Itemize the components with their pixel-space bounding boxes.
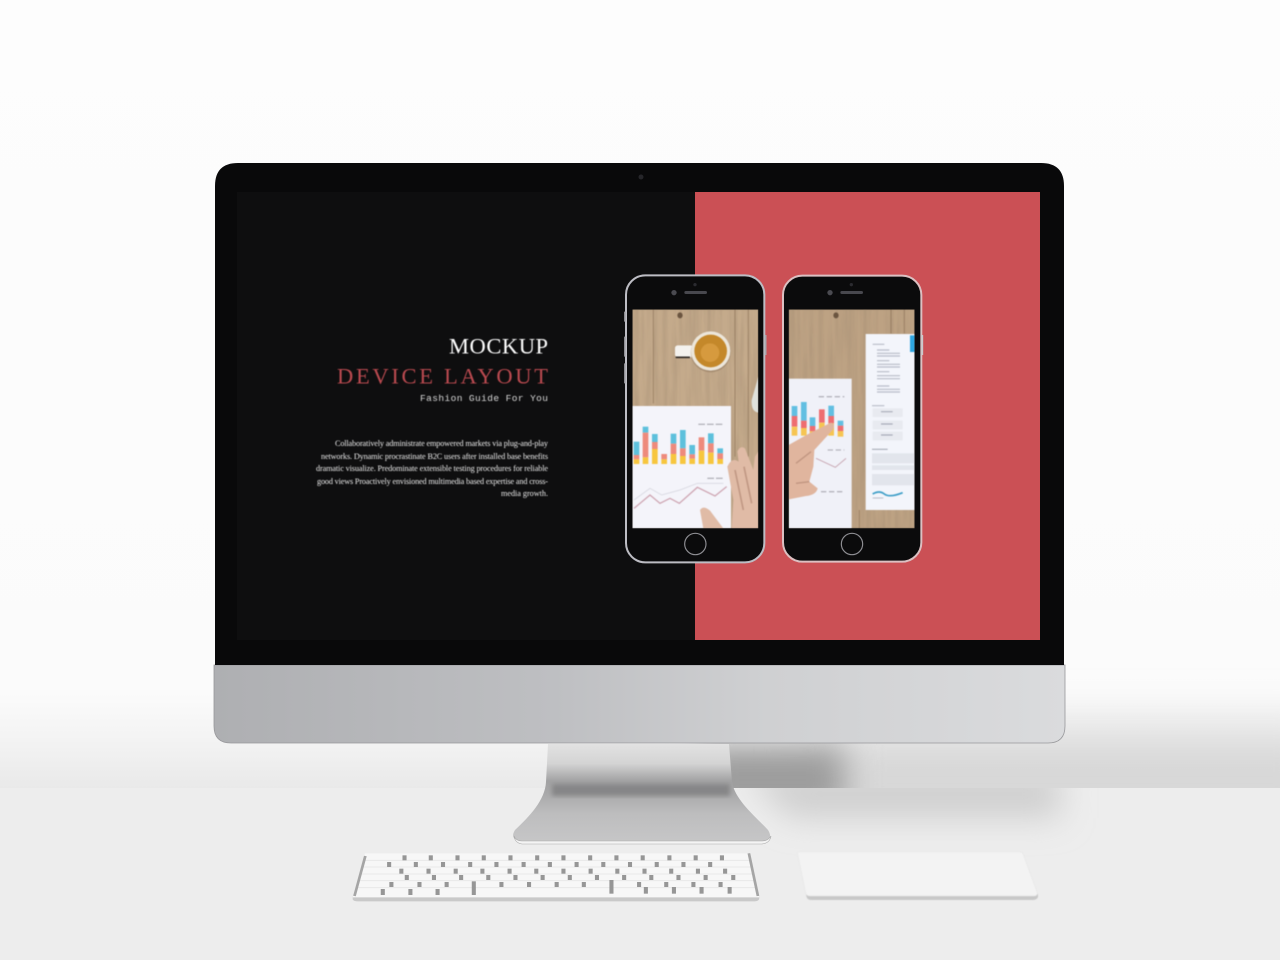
screen dark panel	[237, 192, 695, 640]
paper with charts	[632, 406, 731, 528]
body paragraph: dramatic visualize. Predominate extensible testing procedures for reliable	[316, 464, 548, 473]
shadow on desk right of stand	[756, 788, 1068, 828]
hand	[727, 447, 758, 528]
paper with bars	[789, 379, 852, 528]
monitor aluminium chin	[214, 665, 1065, 743]
monitor	[214, 163, 1065, 743]
stacked bar chart	[634, 427, 723, 464]
body paragraph: media growth.	[501, 489, 548, 498]
body paragraph	[316, 439, 549, 498]
keyboard base	[353, 897, 759, 901]
slide text block	[316, 334, 549, 498]
heading: mockup: MOCKUP	[449, 334, 548, 358]
camera	[638, 174, 644, 180]
phone body	[783, 276, 921, 562]
monitor black bezel	[215, 163, 1064, 665]
keyboard deck	[353, 853, 759, 897]
home button	[685, 533, 706, 555]
body paragraph: good views Proactively envisioned multimedia based expertise and cross-	[317, 477, 548, 486]
document sheet	[866, 334, 915, 510]
body paragraph: Collaboratively administrate empowered markets via plug-and-play	[335, 439, 549, 448]
phone body	[626, 275, 764, 562]
side buttons	[625, 312, 766, 383]
stacked bars	[792, 402, 843, 437]
heading: device layout: DEVICE LAYOUT	[337, 364, 548, 388]
earpiece and camera	[827, 283, 863, 295]
key gaps	[381, 855, 735, 895]
phone screen photo: desk with coffee and chart	[632, 309, 758, 528]
pointing hand	[789, 423, 834, 499]
side button	[920, 335, 925, 355]
phone right	[783, 276, 922, 562]
monitor stand	[513, 744, 771, 844]
coffee cup	[675, 331, 731, 372]
desk surface	[0, 788, 1280, 960]
phone screen photo: hand pointing at chart	[789, 309, 915, 528]
screen red panel	[695, 192, 1040, 640]
keyboard side edges	[354, 853, 758, 896]
subheading: Fashion Guide For You	[420, 393, 548, 404]
home button	[841, 533, 863, 555]
line chart	[816, 458, 846, 467]
earpiece and camera	[671, 283, 707, 295]
phone left	[625, 275, 766, 562]
body paragraph: networks. Dynamic procrastinate B2C users after installed base benefits	[321, 452, 548, 461]
shadows on wall right of stand	[687, 716, 1280, 788]
keyboard	[353, 853, 759, 901]
line chart	[634, 487, 727, 508]
keyboard row lines	[356, 860, 757, 888]
trackpad	[798, 852, 1038, 900]
